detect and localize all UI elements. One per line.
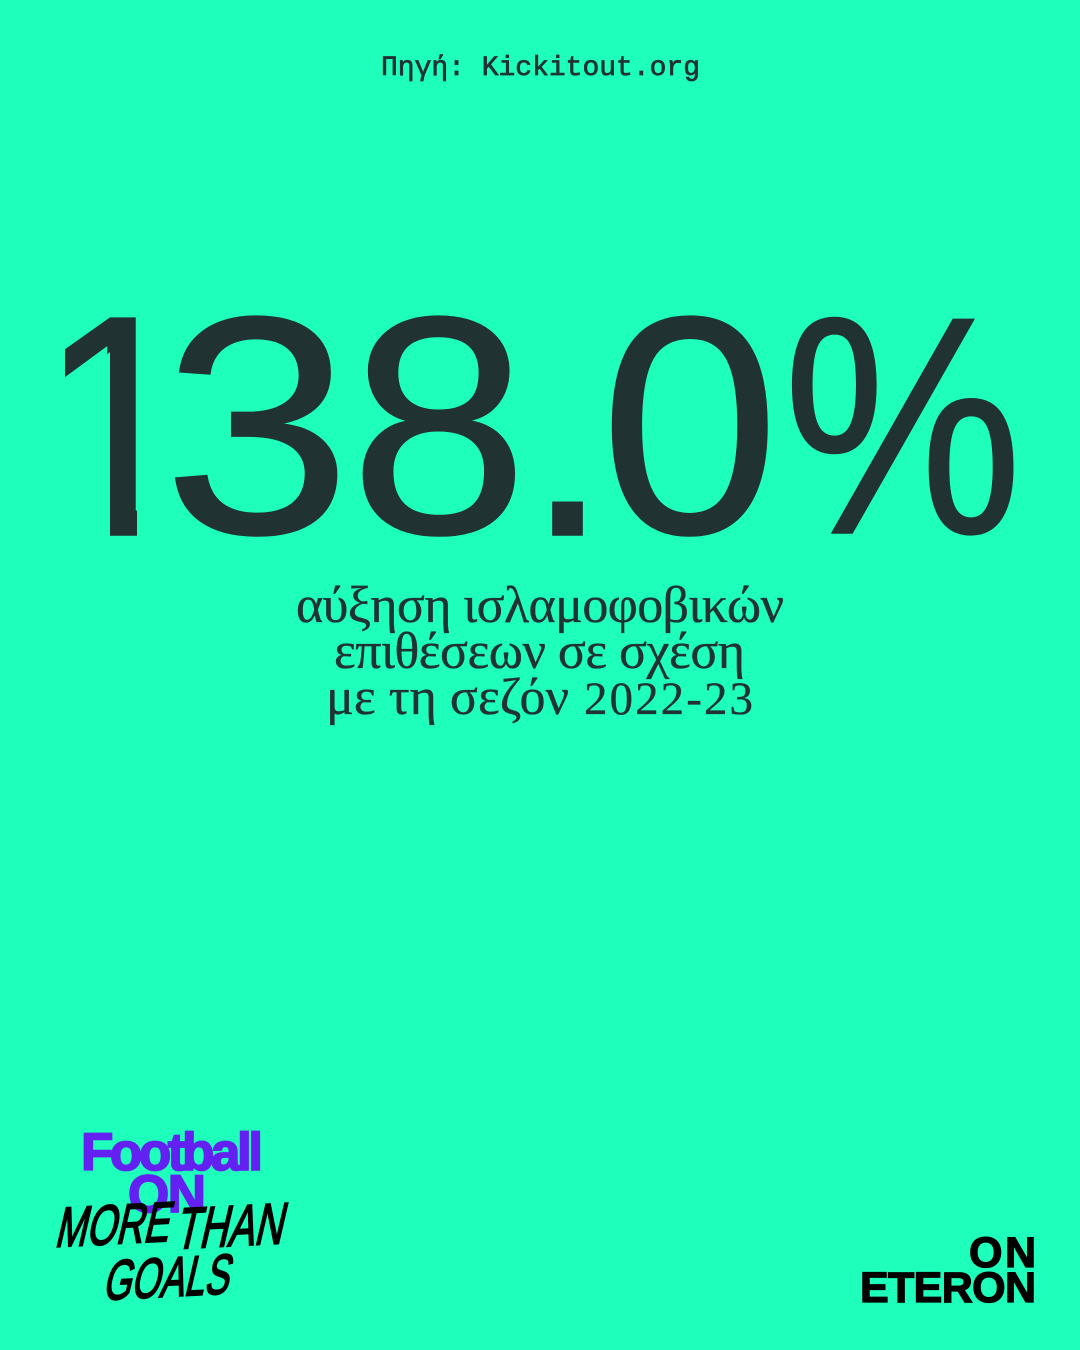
description text: αύξηση ισλαμοφοβικών bbox=[296, 577, 784, 634]
source line: Πηγή: Kickitout.org bbox=[381, 53, 700, 84]
big statistic: . bbox=[525, 258, 610, 600]
big statistic: 8 bbox=[350, 252, 528, 599]
logo: Football ON More Than Goals bbox=[51, 1123, 294, 1313]
logo: On Eteron bbox=[860, 1229, 1036, 1312]
big statistic: 3 bbox=[163, 252, 351, 599]
logo script: More Than Goals: THAN bbox=[171, 1190, 294, 1262]
logo script: More Than Goals bbox=[51, 1190, 294, 1313]
description text: επιθέσεων σε σχέση bbox=[334, 623, 745, 680]
logo: On Eteron: ON bbox=[969, 1229, 1036, 1277]
logo wordmark: Football ON: Football bbox=[81, 1123, 263, 1182]
logo wordmark: Football ON: ON bbox=[128, 1165, 206, 1224]
big statistic: % bbox=[783, 252, 1022, 599]
description text: 2022-23 bbox=[584, 673, 753, 725]
logo: On Eteron: ETERON bbox=[860, 1264, 1036, 1312]
big statistic bbox=[65, 315, 1014, 537]
description text bbox=[296, 577, 784, 726]
logo script: More Than Goals: MORE bbox=[51, 1190, 180, 1260]
logo wordmark: Football ON bbox=[81, 1123, 263, 1224]
logo script: More Than Goals: GOALS bbox=[99, 1243, 240, 1313]
big statistic: 0 bbox=[600, 253, 780, 600]
big statistic: 1 bbox=[31, 250, 201, 602]
description text: με τη σεζόν bbox=[326, 669, 569, 726]
